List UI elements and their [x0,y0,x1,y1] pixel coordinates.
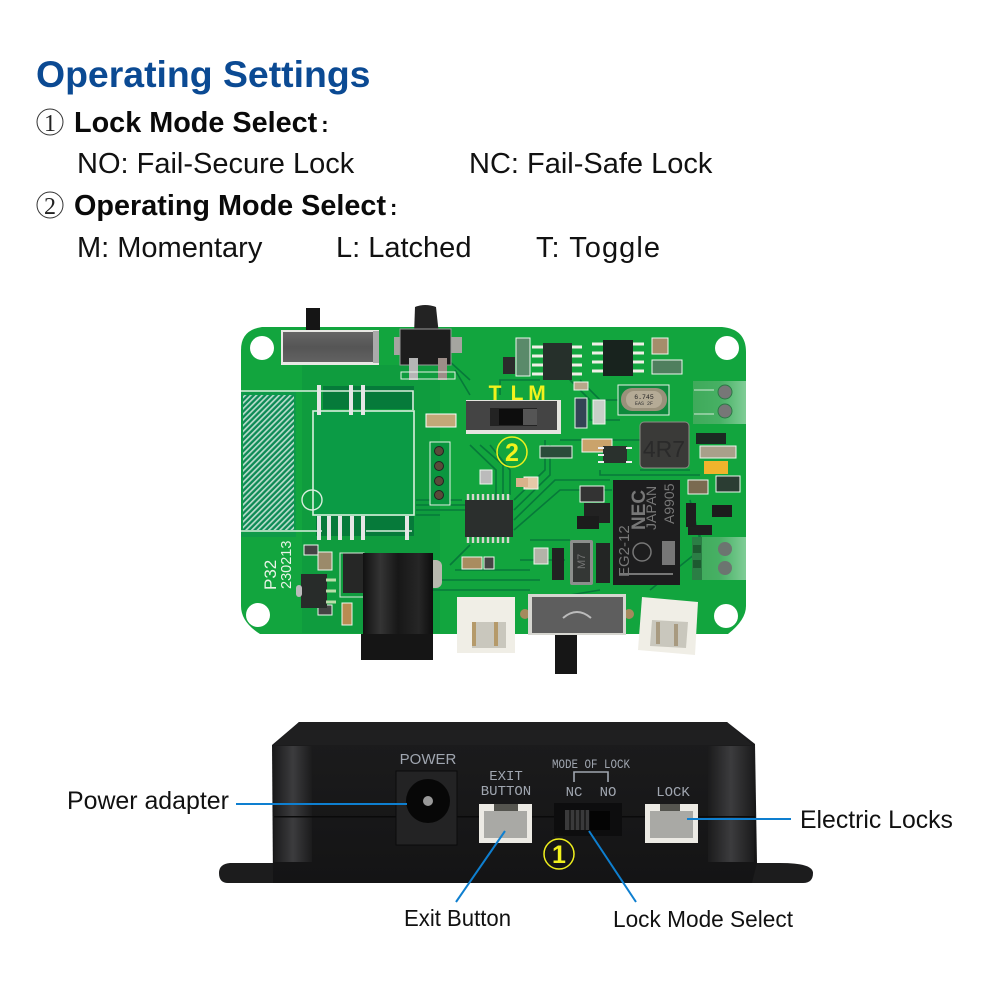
option: momentary: M: Momentary [77,232,263,264]
lock mode switch [554,803,622,836]
board substrate [241,327,746,634]
callout number 2 [497,437,527,467]
board silkscreen text: 230213 [279,541,295,589]
crystal: 6.745 [634,394,654,401]
leader line: electric locks [687,818,791,820]
icon: circled number 1: 1 [44,111,56,137]
heading: operating mode select: Operating Mode Select: [74,190,397,222]
crystal: EAS 2F [635,401,653,407]
label: LOCK: LOCK [656,785,690,801]
mounting flanges [219,863,813,883]
heading: lock mode select: Lock Mode Select: [74,107,329,139]
left white connector [457,597,515,653]
callout number 1 [544,839,574,869]
top chamfer [274,722,752,745]
relay: NEC [629,490,650,530]
exit button connector [479,804,532,843]
tantalum capacitor [704,461,728,474]
leader line: lock mode select [589,831,636,902]
T L M labels: T [489,382,502,405]
lock connector [645,804,698,843]
label: EXIT BUTTON: EXIT [489,769,523,785]
circuit board [241,305,746,674]
right white connector [638,597,698,655]
text block: lock mode select [37,107,713,180]
label: EXIT BUTTON [481,769,531,800]
top slide switch [281,308,379,365]
inductor: 4R7 [643,436,685,462]
label: POWER: POWER [400,751,456,768]
DC power jack [361,553,442,660]
inductor [640,422,689,468]
label: MODE OF LOCK: MODE OF LOCK [552,758,630,772]
seam line [274,816,755,818]
text block: operating mode select [37,190,660,264]
T L M labels: M [528,382,546,405]
left corner highlight [274,746,312,862]
right corner highlight [708,746,754,862]
board silkscreen text [261,541,295,590]
leader line: exit button [456,831,505,902]
icon: circled number 1 [37,109,63,137]
bottom terminal block [692,537,746,580]
label: exit button: Exit Button [404,905,511,931]
lock mode slide switch [520,594,634,674]
option: toggle: T: Toggle [536,232,660,264]
mounting holes [246,336,739,628]
label: electric locks: Electric Locks [800,807,953,834]
option: latched: L: Latched [336,232,471,264]
header pads [426,414,456,505]
relay: A9905 [661,483,677,524]
QFP chip [465,494,513,543]
ICs [503,340,732,535]
diodes [296,540,610,608]
callout number 1: 1 [552,841,566,869]
leader line: power adapter [236,803,407,805]
T L M labels [489,382,546,405]
label: power adapter: Power adapter [67,787,229,815]
operating mode slide switch [466,400,561,434]
SMD parts [304,338,740,625]
power jack [396,771,457,845]
LED [516,478,528,487]
icon: circled number 2 [37,192,63,220]
antenna area [241,385,414,540]
T L M labels: L [511,382,524,405]
option: NC fail-safe: NC: Fail-Safe Lock [469,148,713,180]
label: NC: NC [566,785,582,801]
callout number 2: 2 [505,439,519,467]
diodes: M7 [576,554,588,569]
relay: EG2-12 [616,525,633,577]
copper traces [416,345,700,595]
crystal [618,385,669,415]
enclosure [219,722,813,883]
case body [272,722,757,883]
label: NO: NO [600,785,616,801]
top terminal block [693,381,746,424]
label: lock mode select: Lock Mode Select [613,906,794,932]
label: EXIT BUTTON: BUTTON [481,784,531,800]
relay: JAPAN [643,486,659,530]
title: Operating Settings [36,53,370,95]
relay [613,480,680,585]
tactile button [394,305,462,380]
NC NO bracket [574,772,608,782]
option: NO fail-secure: NO: Fail-Secure Lock [77,148,355,180]
board silkscreen text: P32 [261,560,280,590]
icon: circled number 2: 2 [44,194,56,220]
